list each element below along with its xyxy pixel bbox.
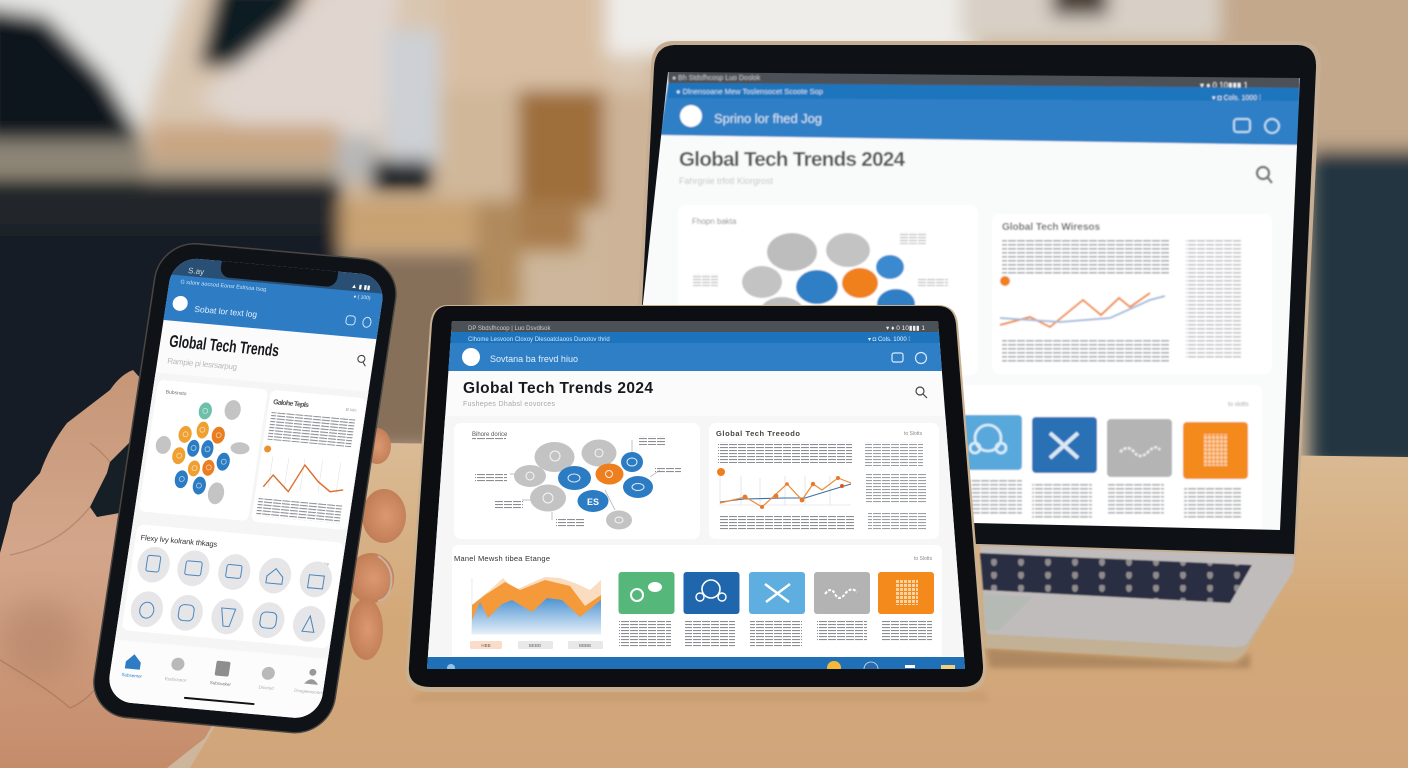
laptop panel two line chart	[999, 222, 1242, 362]
laptop keyboard	[980, 553, 1252, 603]
panel: phone icon grid	[122, 524, 345, 649]
laptop header label: Sprino lor fhed Jog	[714, 111, 822, 126]
phone search icon	[357, 355, 367, 366]
tablet subtitle: Fushepes Dhabsl eovorces	[463, 401, 556, 408]
tablet blue strip	[450, 332, 940, 343]
orange bubble	[596, 464, 624, 484]
phone chart marker	[264, 445, 272, 453]
tablet chart grid	[720, 476, 851, 505]
tile: orange	[878, 572, 934, 614]
panel: tablet market tiles	[452, 545, 942, 660]
tablet blue strip: ▾ ◘ Cols. 1000 ⁞	[868, 337, 910, 343]
phone line series	[263, 462, 346, 497]
nav labels: Subsemor	[121, 672, 143, 679]
phone orange bubbles	[169, 419, 210, 477]
laptop blue header: ● Dlnensoane Mew Toslensocet Scoote Sop	[676, 87, 823, 96]
phone title: Global Tech Trends	[168, 332, 280, 360]
phone body	[89, 240, 401, 736]
laptop status bar: ▾ ♦ 0 10▮▮▮ 1	[1200, 81, 1249, 90]
tablet search icon	[916, 387, 927, 398]
tile: light blue	[749, 572, 805, 614]
laptop header icons	[1234, 119, 1279, 133]
nav: home icon	[125, 654, 142, 670]
panel: tablet trends chart: to Slotts	[904, 431, 923, 437]
gap between thumb and palm	[90, 432, 150, 517]
tile: gray	[814, 572, 870, 614]
phone blue header: ▲ ▮ ▮▮	[351, 284, 371, 291]
phone status area	[169, 255, 387, 296]
tablet title: Global Tech Trends 2024	[463, 380, 653, 397]
panel: tablet market tiles: to Slotts	[914, 556, 933, 562]
gray bubbles	[514, 440, 632, 530]
tablet bottom bar	[420, 657, 970, 676]
tablet line series	[720, 484, 851, 502]
fingertips	[348, 428, 406, 660]
blue bubbles	[558, 452, 653, 512]
tablet	[406, 305, 986, 692]
phone screen	[104, 249, 390, 722]
tablet status bar: DP Sbdsfhcoop | Luo Dsvdlsok	[468, 326, 551, 332]
tile: green	[618, 572, 674, 614]
tablet app header	[448, 343, 942, 371]
palm creases	[0, 443, 110, 708]
table reflection shadows	[410, 648, 1250, 702]
tile: dark blue	[684, 572, 740, 614]
nav labels	[121, 672, 326, 696]
nav labels: Subsvaker	[209, 680, 232, 687]
bubble glyphs	[526, 449, 644, 523]
tablet area chart	[472, 577, 601, 634]
laptop subtitle: Fahrgnie trfotl Kiorgrost	[679, 176, 774, 186]
phone teal bubble	[198, 402, 213, 420]
panel: phone chart: El lolo	[345, 407, 358, 413]
phone	[89, 240, 401, 736]
phone gray icon circles	[128, 545, 334, 643]
nav labels: Dosgeeosoome	[294, 688, 326, 696]
laptop deck	[980, 543, 1295, 647]
tablet header text: Sovtana ba frevd hiuo	[490, 354, 578, 364]
phone notch	[220, 253, 340, 287]
tablet bubble heading: Bihore dorice	[472, 432, 508, 438]
label in bubble: ES	[587, 497, 599, 507]
tablet chart caption	[720, 516, 854, 530]
laptop search icon	[1257, 167, 1272, 183]
tablet body	[406, 305, 986, 692]
laptop base lip	[980, 560, 1293, 661]
tablet chart buttons: BBBB	[579, 643, 591, 648]
laptop base and keyboard	[980, 543, 1295, 661]
tablet status bar: ▾ ♦ 0 10▮▮▮ 1	[886, 325, 925, 332]
tablet screen	[420, 320, 970, 676]
phone logo	[172, 295, 189, 312]
laptop title: Global Tech Trends 2024	[679, 148, 906, 171]
phone chart caption	[256, 498, 342, 523]
nav labels: Esdoosnor	[165, 676, 187, 683]
laptop screen	[642, 72, 1300, 530]
phone blue header	[163, 267, 385, 339]
phone subtitle: Rampie pi lesrsarpug	[167, 356, 238, 372]
tablet status bar	[451, 321, 939, 332]
laptop blue header: ▾ ◘ Cols. 1000 ⁞	[1212, 95, 1261, 102]
tablet blue strip: Clhome Lesvoon Cloxoy Dlesoatclaoos Dunotov thrid	[468, 337, 610, 343]
nav labels: Dovosd	[258, 684, 275, 691]
panel: phone icon grid: to slop	[317, 560, 330, 567]
laptop panel three tiles: to slotts	[1228, 402, 1249, 408]
callout connectors	[510, 440, 660, 520]
laptop lid	[625, 41, 1321, 556]
panel: tablet trends chart	[709, 423, 939, 539]
phone header icons	[345, 315, 372, 328]
panel: phone chart	[251, 390, 366, 530]
fingernail ring	[378, 556, 392, 601]
tablet logo	[462, 348, 480, 366]
phone chart text	[267, 412, 355, 447]
tablet chart buttons: BEBD	[529, 643, 542, 648]
home indicator	[184, 697, 255, 705]
palm and thumb	[0, 370, 218, 768]
phone bubble glyphs	[172, 407, 234, 490]
tablet chart buttons: HBB	[481, 643, 491, 648]
phone blue header: ♦ ( 100)	[353, 294, 371, 302]
laptop header logo	[680, 105, 702, 127]
phone bottom nav	[104, 641, 331, 722]
laptop blue header	[660, 83, 1300, 145]
tablet chart heading: Global Tech Treeodo	[716, 429, 800, 438]
panel: phone bubble network: Bubsnsto	[165, 389, 187, 397]
phone outline icons	[138, 555, 325, 634]
phone blue bubbles	[173, 438, 233, 497]
hand behind phone	[0, 370, 406, 768]
laptop trackpad	[983, 594, 1033, 630]
tablet side notes	[865, 442, 926, 530]
tile captions	[619, 620, 932, 647]
laptop panel one bubbles: Fhopn bakta	[692, 217, 737, 226]
tablet chart marker	[717, 468, 725, 476]
nav: gray icons	[170, 656, 320, 685]
strap and shadow near wrist	[0, 742, 18, 768]
laptop (out of focus)	[610, 41, 1321, 661]
phone chart heading: Galohe Tepls	[273, 399, 310, 409]
panel: tablet bubble diagram	[454, 423, 700, 539]
laptop panel two line chart: Global Tech Wiresos	[1002, 222, 1101, 233]
phone status text: G sdonr aocsod Eonsr Eslrsoa tsog	[180, 279, 267, 293]
tablet header icons	[892, 352, 926, 364]
wooden table	[190, 443, 1408, 768]
tablet chart buttons	[470, 641, 603, 649]
phone gray bubbles	[148, 394, 257, 507]
laptop panel one bubbles	[692, 218, 948, 305]
phone status area: S.ay	[188, 266, 205, 276]
phone grid heading: Flexy lvy kolrank thkags	[140, 533, 218, 549]
phone header text: Sobat lor text log	[194, 304, 258, 319]
laptop panel three tiles	[965, 402, 1249, 518]
laptop status bar	[667, 72, 1300, 90]
laptop status bar: ● Bh Stdsfhcosp Luo Doslok	[672, 75, 761, 82]
tablet market heading: Manel Mewsh tibea Etange	[454, 554, 550, 563]
panel: phone bubble network	[139, 380, 268, 521]
palm shading	[0, 600, 80, 680]
tablet chart body text	[718, 442, 852, 463]
